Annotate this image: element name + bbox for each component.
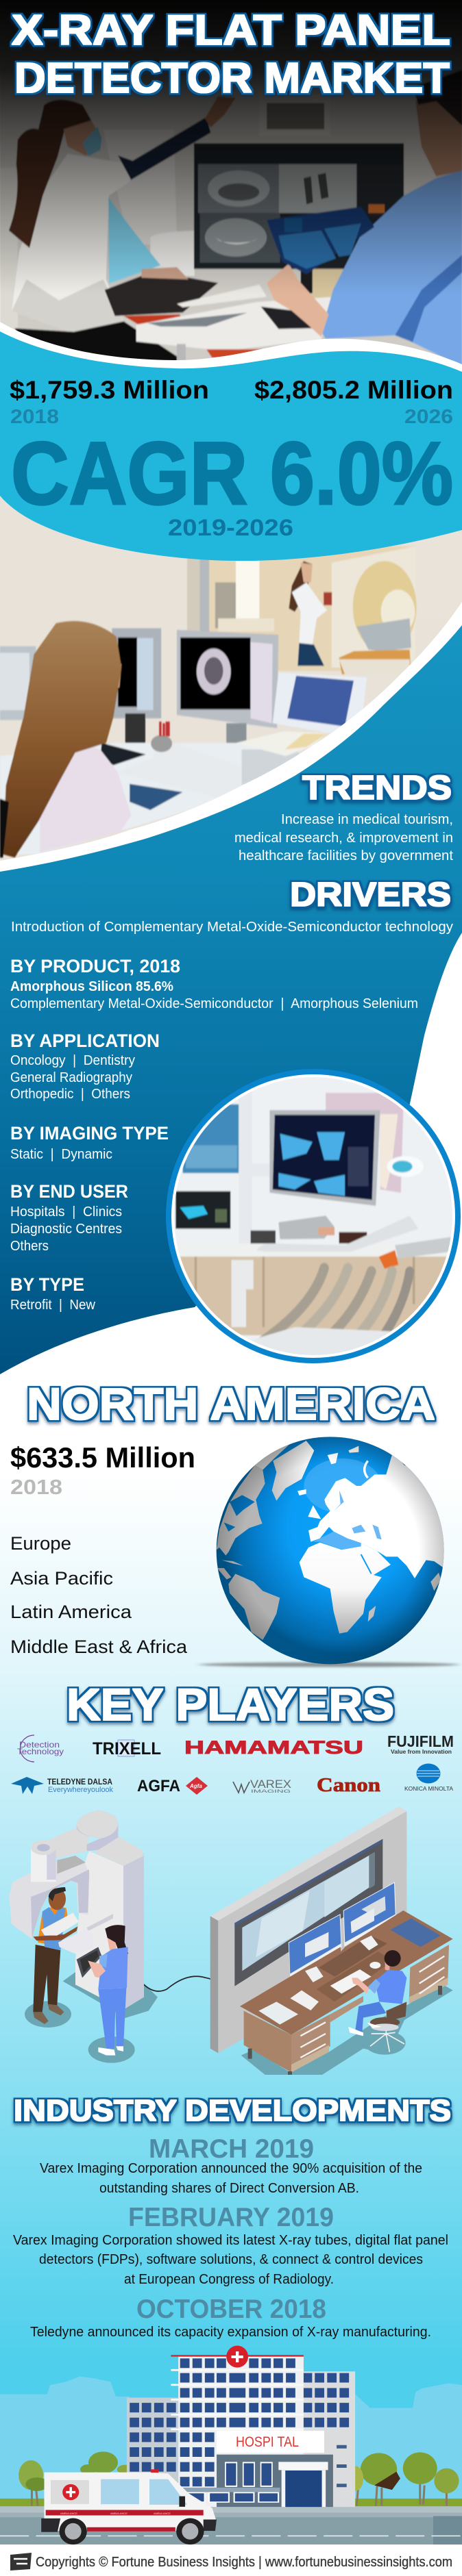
title: X-RAY FLAT PANEL <box>12 7 450 54</box>
patient <box>33 1887 79 2024</box>
logo: Konica Minolta: KONICA MINOLTA <box>404 1786 454 1792</box>
development: February 2019: Varex Imaging Corporation showed its latest X-ray tubes, digital flat panel <box>13 2233 448 2248</box>
ambulance labels: AMBULANCE <box>60 2512 77 2515</box>
white band over second photo <box>0 602 462 945</box>
by product: BY PRODUCT, 2018 <box>10 956 180 976</box>
greenland <box>272 1441 314 1501</box>
2018 label: 2018 <box>10 406 59 428</box>
development: March 2019: MARCH 2019 <box>149 2134 314 2164</box>
development: October 2018: Teledyne announced its capacity expansion of X-ray manufacturing. <box>30 2325 431 2340</box>
road <box>0 2506 462 2513</box>
desk <box>240 1910 453 2035</box>
other regions: Latin America <box>10 1602 132 1622</box>
control room wall and desk <box>210 1806 453 2075</box>
heading: industry developments: INDUSTRY DEVELOPMENTS <box>14 2094 451 2127</box>
by application: Orthopedic | Others <box>10 1086 130 1102</box>
by application: BY APPLICATION <box>10 1031 160 1051</box>
development: February 2019 <box>13 2203 448 2287</box>
heading: North America: NORTH AMERICA <box>27 1378 435 1429</box>
by imaging type: BY IMAGING TYPE <box>10 1123 169 1144</box>
roof line and cross <box>171 2355 304 2357</box>
trends text <box>234 811 453 863</box>
North America value: $633.5 Million <box>10 1441 195 1474</box>
2026 label: 2026 <box>404 406 453 428</box>
ambulance <box>41 2469 217 2545</box>
monitors <box>289 1914 341 1978</box>
africa and arabia <box>300 1543 391 1634</box>
2026 value: $2,805.2 Million <box>254 376 453 404</box>
logo: Canon: Canon <box>317 1775 380 1796</box>
trends text: Increase in medical tourism, <box>281 811 453 827</box>
trends heading: TRENDS <box>302 770 452 807</box>
logo: Varex: IMAGING <box>251 1790 291 1794</box>
logo: Detection Technology <box>17 1735 64 1762</box>
white wave under photo <box>0 322 462 383</box>
ambulance labels: AMBULANCE <box>154 2512 171 2515</box>
page background <box>0 870 462 2576</box>
by type: Retrofit | New <box>10 1297 95 1313</box>
logo: Detection Technology: Technology <box>17 1747 64 1756</box>
right wing <box>304 2371 355 2507</box>
CAGR period: 2019-2026 <box>168 515 293 541</box>
by end user <box>10 1181 128 1254</box>
drivers text: Introduction of Complementary Metal-Oxide-Semiconductor technology <box>11 919 454 935</box>
heading: key players: KEY PLAYERS <box>66 1679 394 1730</box>
north america land <box>217 1465 265 1556</box>
title: DETECTOR MARKET <box>14 55 450 102</box>
other regions: Asia Pacific <box>10 1568 113 1589</box>
by end user: Diagnostic Centres <box>10 1221 122 1237</box>
2018 value: $1,759.3 Million <box>10 376 209 404</box>
other regions <box>10 1533 188 1657</box>
control panel <box>87 1914 113 1931</box>
eurasia <box>308 1455 444 1578</box>
left wing <box>127 2398 178 2507</box>
other regions: Middle East & Africa <box>10 1637 188 1657</box>
footer <box>0 2545 462 2576</box>
logo: Teledyne Dalsa <box>11 1777 113 1794</box>
background: second photo wall <box>0 363 462 876</box>
by type <box>10 1274 95 1313</box>
globe <box>217 1437 457 1664</box>
logo: Agfa: Agfa <box>189 1783 202 1789</box>
globe shadow <box>199 1663 459 1667</box>
development: February 2019: detectors (FDPs), software solutions, & connect & control devices <box>39 2252 423 2267</box>
logos <box>11 1732 454 1796</box>
south america <box>228 1574 280 1640</box>
main tower <box>178 2357 304 2507</box>
North America year: 2018 <box>10 1475 62 1499</box>
by end user: BY END USER <box>10 1181 128 1202</box>
logo: Teledyne Dalsa: Everywhereyoulook <box>48 1786 113 1794</box>
other regions: Europe <box>10 1533 71 1554</box>
logo: Fujifilm: FUJIFILM <box>387 1732 454 1750</box>
ambulance labels <box>60 2512 171 2515</box>
by imaging type: Static | Dynamic <box>10 1146 112 1162</box>
title <box>12 7 450 102</box>
ambulance labels: AMBULANCE <box>110 2512 127 2515</box>
uk <box>308 1505 321 1519</box>
development: March 2019 <box>40 2134 422 2196</box>
panel: market size blue band <box>0 331 462 561</box>
dark top overlay <box>0 0 462 294</box>
logo: Trixell: TRIXELL <box>93 1739 161 1758</box>
by imaging type <box>10 1123 169 1162</box>
by product <box>10 956 418 1011</box>
logo: Teledyne Dalsa: TELEDYNE DALSA <box>47 1777 112 1786</box>
panel: segments blue <box>0 625 462 1374</box>
drivers heading: DRIVERS <box>290 876 451 913</box>
icon: Fortune Business Insights logo <box>10 2553 32 2571</box>
trees <box>19 2451 459 2506</box>
trends text: medical research, & improvement in <box>234 830 453 846</box>
development: March 2019: Varex Imaging Corporation announced the 90% acquisition of the <box>40 2161 422 2176</box>
by application <box>10 1031 160 1102</box>
logo: Fujifilm: Value from Innovation <box>391 1749 452 1755</box>
logo: Varex: VAREX <box>250 1778 291 1791</box>
operator <box>348 1950 406 2052</box>
skyline <box>0 2377 462 2501</box>
arctic islands <box>297 1446 358 1495</box>
logo: Konica Minolta <box>404 1764 454 1792</box>
development: October 2018 <box>30 2295 431 2340</box>
logo: Agfa <box>137 1777 208 1795</box>
trends text: healthcare facilities by government <box>239 848 453 863</box>
development: March 2019: outstanding shares of Direct Conversion AB. <box>99 2181 359 2196</box>
photo: CT scanner control room <box>0 533 462 857</box>
by product: Complementary Metal-Oxide-Semiconductor | Amorphous Selenium <box>10 996 418 1011</box>
logo: Agfa: AGFA <box>137 1777 180 1795</box>
illustration: x-ray room <box>9 1806 453 2075</box>
photo: dentists reviewing x-ray <box>0 0 462 381</box>
x-ray machine with patient and technologist <box>9 1810 217 2063</box>
illustration: hospital street scene <box>0 2346 462 2545</box>
by application: Oncology | Dentistry <box>10 1052 136 1068</box>
logo: Varex <box>233 1778 291 1794</box>
logo: Hamamatsu: HAMAMATSU <box>184 1737 363 1758</box>
entrance <box>217 2455 333 2507</box>
hospital sign: HOSPI TAL <box>236 2434 299 2450</box>
development: February 2019: FEBRUARY 2019 <box>128 2203 334 2232</box>
mediterranean <box>313 1532 361 1550</box>
technologist <box>77 1925 128 2056</box>
by end user: Others <box>10 1238 49 1254</box>
by product: Amorphous Silicon 85.6% <box>10 978 173 994</box>
development: February 2019: at European Congress of Radiology. <box>124 2272 334 2287</box>
grass <box>0 2499 462 2507</box>
by end user: Hospitals | Clinics <box>10 1204 122 1220</box>
logo: Detection Technology: Detection <box>19 1740 60 1750</box>
circular photo: dental clinic <box>165 1068 462 1369</box>
by application: General Radiography <box>10 1070 133 1085</box>
by type: BY TYPE <box>10 1274 84 1295</box>
development: October 2018: OCTOBER 2018 <box>136 2295 326 2324</box>
